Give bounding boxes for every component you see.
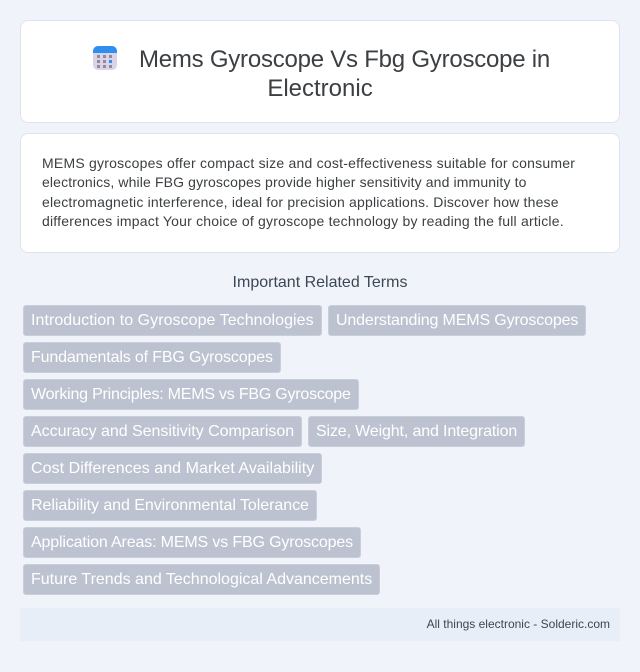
tag: Size, Weight, and Integration: [316, 423, 517, 440]
tag: Future Trends and Technological Advancements: [31, 571, 372, 588]
intro text: MEMS gyroscopes offer compact size and cost-effectiveness suitable for consumer: [42, 155, 575, 171]
tag: Accuracy and Sensitivity Comparison: [31, 423, 294, 440]
tag: [328, 305, 586, 336]
tag: Reliability and Environmental Tolerance: [31, 497, 309, 514]
intro text: [42, 155, 575, 229]
tag: [23, 342, 281, 373]
tag: [23, 379, 359, 410]
intro text: electromagnetic interference, ideal for precision applications. Discover how these: [42, 194, 559, 210]
tag: Introduction to Gyroscope Technologies: [31, 312, 314, 329]
tag: [23, 527, 361, 558]
tag: Understanding MEMS Gyroscopes: [336, 312, 578, 329]
tag: Fundamentals of FBG Gyroscopes: [31, 349, 273, 366]
tag: Cost Differences and Market Availability: [31, 460, 314, 477]
tag: [23, 453, 322, 484]
tag: Working Principles: MEMS vs FBG Gyroscope: [31, 386, 351, 403]
title: Electronic: [267, 75, 373, 102]
tag: [23, 305, 322, 336]
intro text panel: [20, 133, 620, 253]
header panel: [20, 20, 620, 123]
icon: calendar: [93, 46, 117, 70]
tag: [308, 416, 525, 447]
tag: [23, 564, 380, 595]
footer bar: [20, 608, 620, 641]
tag: Application Areas: MEMS vs FBG Gyroscopes: [31, 534, 353, 551]
tag: [23, 490, 317, 521]
title: Mems Gyroscope Vs Fbg Gyroscope in: [139, 46, 550, 73]
intro text: differences impact Your choice of gyroscope technology by reading the full article.: [42, 213, 564, 229]
section heading: Important Related Terms: [233, 274, 407, 291]
title: [139, 46, 550, 102]
tag list: [23, 305, 586, 595]
tag: [23, 416, 302, 447]
intro text: electronics, while FBG gyroscopes provide higher sensitivity and immunity to: [42, 174, 527, 190]
footer text: All things electronic - Solderic.com: [427, 617, 610, 631]
